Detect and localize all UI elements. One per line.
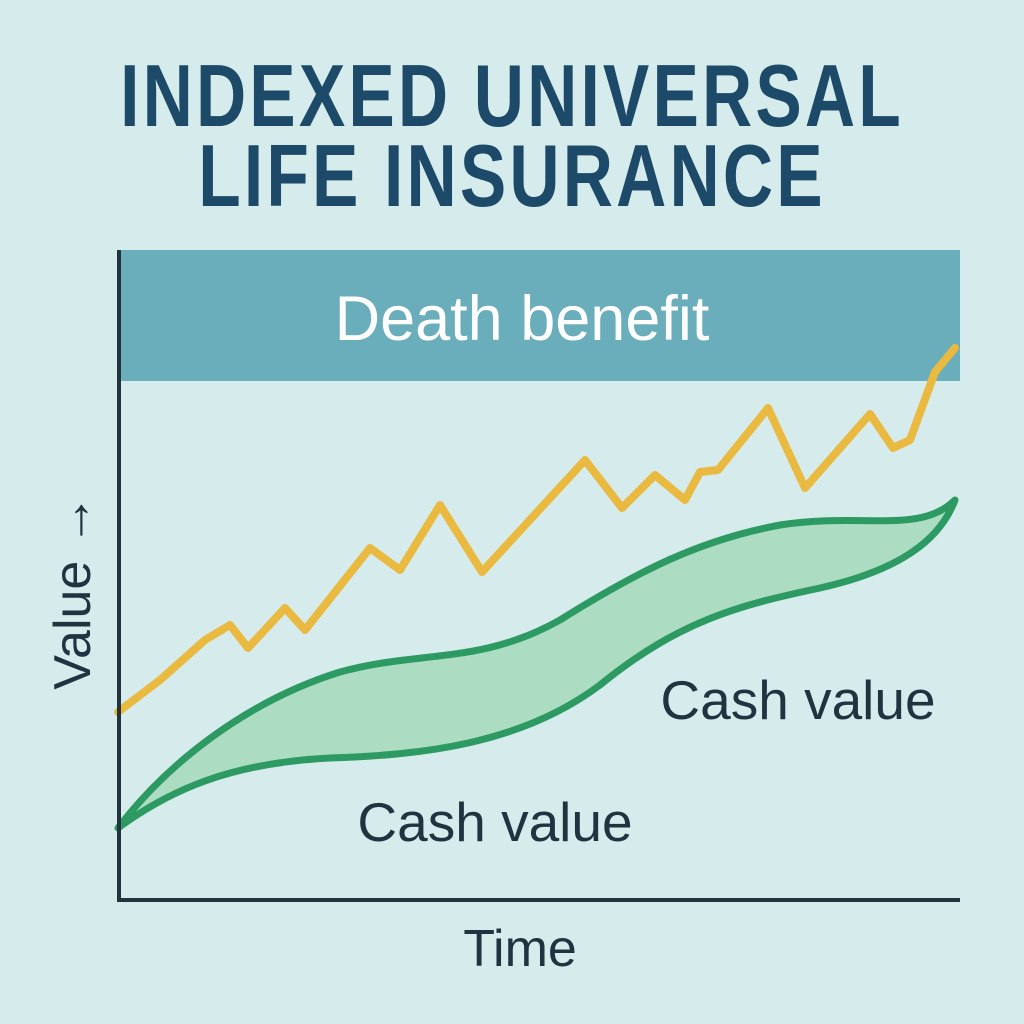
label: value axis: Value → <box>44 494 102 690</box>
title: LIFE INSURANCE <box>198 126 826 225</box>
label: time axis: Time <box>463 920 577 978</box>
title: INDEXED UNIVERSAL <box>120 46 904 145</box>
cash value band <box>118 500 955 828</box>
label: cash value right: Cash value <box>660 669 936 731</box>
index growth line <box>118 348 955 712</box>
panel: death benefit band <box>120 250 960 381</box>
label: cash value lower: Cash value <box>357 791 633 853</box>
title <box>120 46 904 225</box>
axes <box>117 250 960 901</box>
panel: death benefit band: Death benefit <box>335 284 710 354</box>
